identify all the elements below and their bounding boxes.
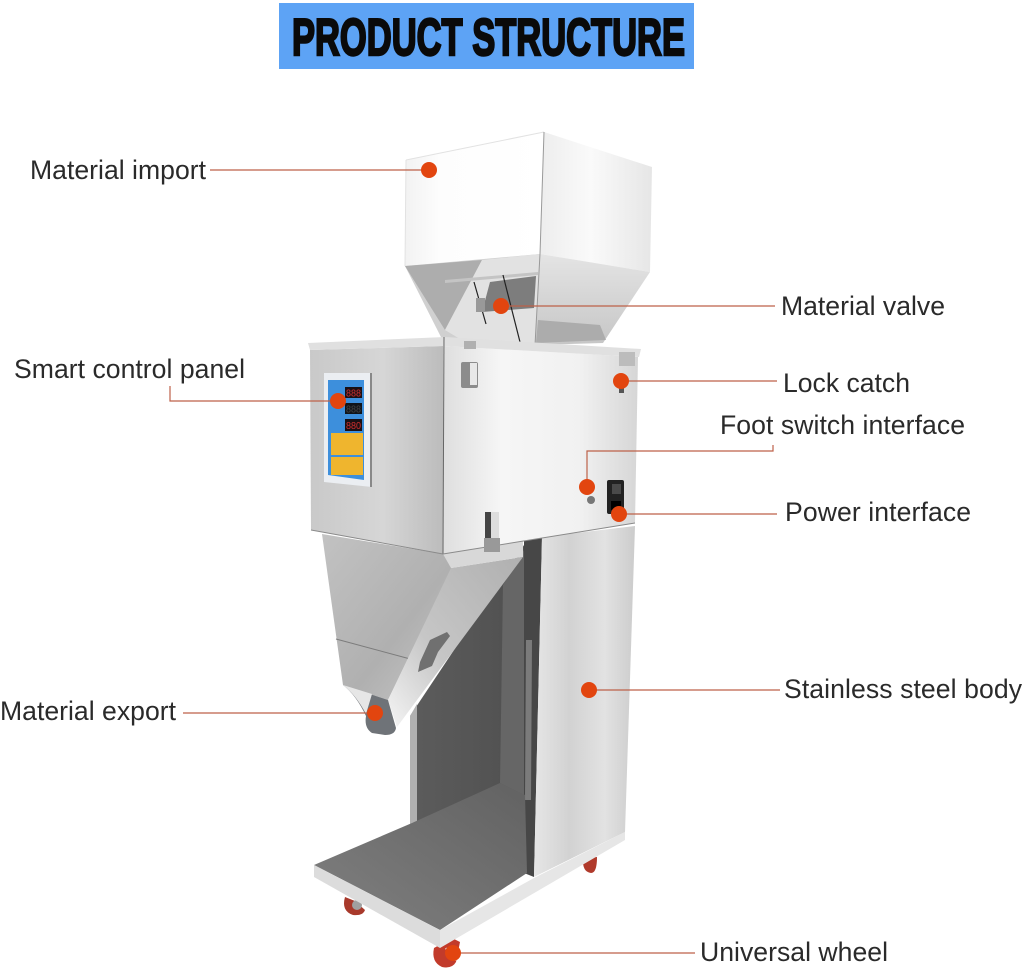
- control panel: 888: [346, 404, 361, 416]
- callout: Power interface: Power interface: [785, 497, 971, 527]
- power socket: [587, 480, 624, 514]
- callout: Material import: [30, 155, 437, 185]
- callout: Stainless steel body: [581, 674, 1023, 704]
- callout: Foot switch interface: [579, 410, 965, 495]
- callout: Foot switch interface: Foot switch interface: [720, 410, 965, 440]
- control panel: 888: [346, 388, 361, 400]
- callout: Lock catch: [613, 368, 910, 398]
- title banner: PRODUCT STRUCTURE: [292, 9, 685, 67]
- machine illustration: [308, 132, 652, 967]
- callout: Lock catch: Lock catch: [783, 368, 910, 398]
- callout: Material import: Material import: [30, 155, 207, 185]
- callout: Universal wheel: Universal wheel: [700, 937, 888, 967]
- base platform: [314, 783, 625, 948]
- interior back panel: [410, 537, 542, 877]
- callout: Smart control panel: Smart control panel: [14, 354, 245, 384]
- wheels: [344, 857, 597, 967]
- stainless column: [534, 526, 635, 877]
- callout: Stainless steel body: Stainless steel body: [784, 674, 1023, 704]
- control panel: [324, 373, 372, 487]
- hopper: [405, 132, 652, 345]
- title banner: [279, 3, 694, 69]
- callout: Material export: [0, 696, 383, 726]
- callout: Material valve: [493, 291, 945, 321]
- callout: Smart control panel: [14, 354, 346, 409]
- main housing: [308, 337, 641, 554]
- callout: Power interface: [611, 497, 971, 527]
- latches: [418, 341, 635, 672]
- callout: Universal wheel: [445, 937, 888, 967]
- lower hopper: [322, 534, 523, 727]
- control panel: 880: [346, 421, 361, 432]
- material spout: [343, 685, 396, 735]
- callout: Material export: Material export: [0, 696, 177, 726]
- callout: Material valve: Material valve: [781, 291, 945, 321]
